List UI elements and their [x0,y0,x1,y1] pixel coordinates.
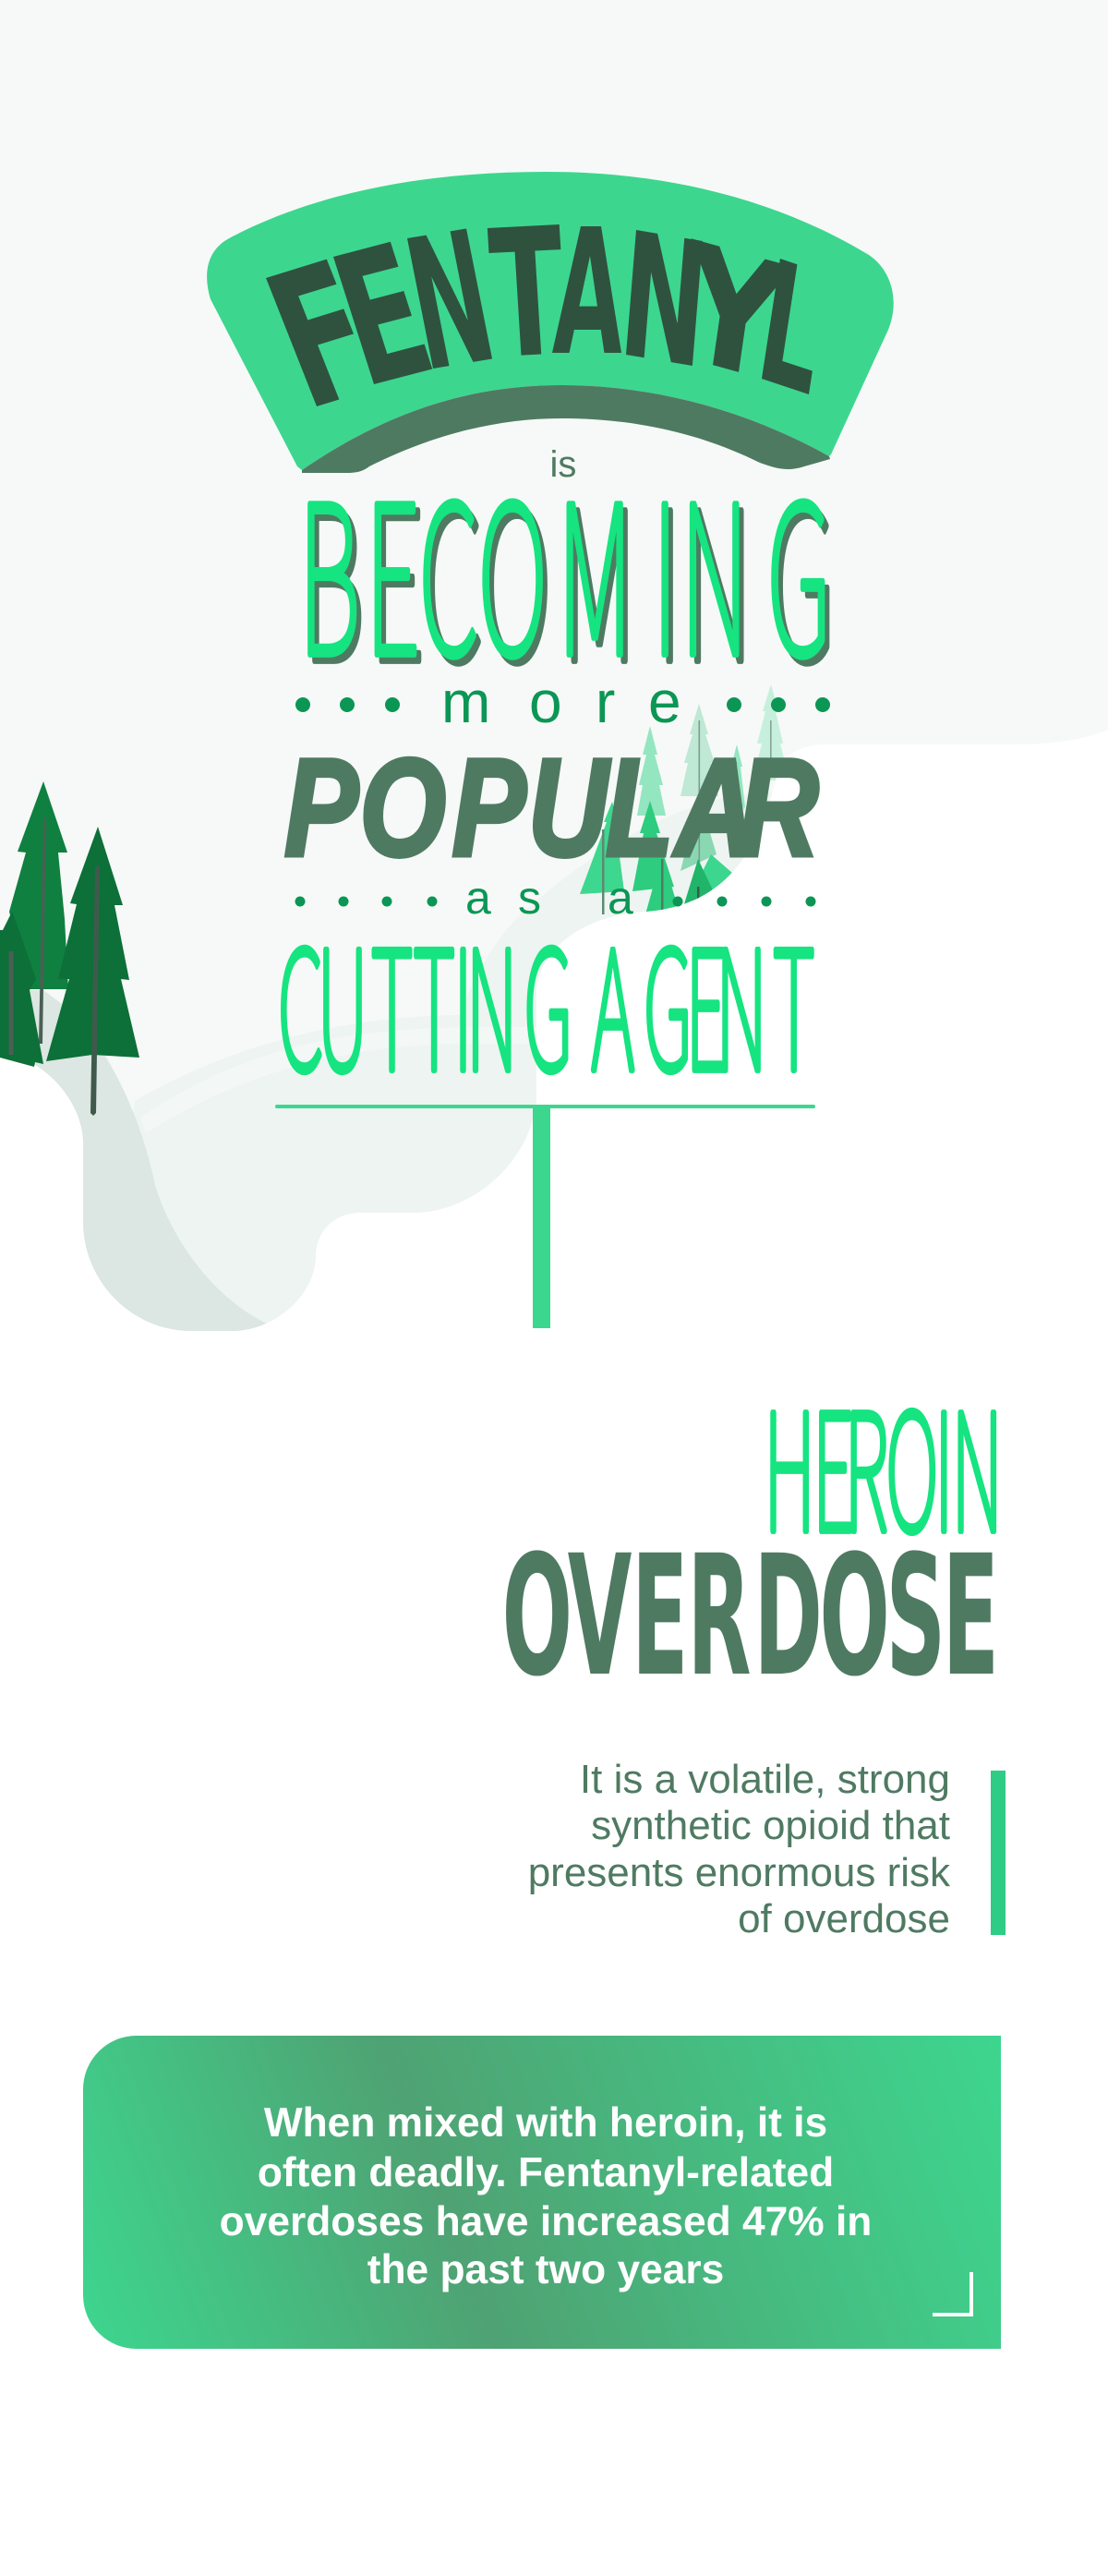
tree: far left tree [0,912,43,1067]
word FENTANYL: L [747,223,835,434]
word FENTANYL: T [485,190,571,399]
tree: palest back tree [757,685,784,780]
banner underside shadow [302,385,830,473]
card background [83,2036,1001,2349]
left forest of trees [0,781,139,1116]
card text: often deadly. Fentanyl-related [258,2150,834,2195]
paragraph with side bar [528,1757,1006,1941]
card text: the past two years [367,2247,724,2292]
word FENTANYL: Y [668,207,799,420]
word FENTANYL: N [613,196,715,408]
word: POPULAR: POPULAR [284,730,819,885]
line: as a with dots: as a [465,872,633,924]
vertical accent bar [991,1771,1006,1935]
tree: back left tree [9,781,72,1044]
paragraph text: of overdose [738,1896,950,1941]
central forest of trees [580,684,789,914]
line: as a with dots [295,872,816,924]
word FENTANYL: E [312,206,454,429]
word FENTANYL: F [242,223,404,453]
tree: light tree center [637,726,666,816]
tree: green tree left [580,802,624,914]
connector line and stem [275,1105,815,1328]
word: HEROIN: HEROIN [764,1344,1003,1578]
tree: green tree middle [632,801,679,914]
line: more with dots [295,669,830,735]
paragraph text: presents enormous risk [528,1850,951,1895]
card text [220,2100,872,2292]
title banner [207,172,894,473]
tree: front right tree [46,827,139,1116]
word: BECOMING: BECOMING [298,417,831,714]
paragraph text [528,1757,951,1941]
words: CUTTING AGENT: CUTTING AGENT [278,879,815,1118]
card text: overdoses have increased 47% in [220,2199,872,2244]
word FENTANYL: N [391,191,509,412]
background hill shapes [0,0,1108,1385]
word FENTANYL: A [550,193,627,394]
tree: light tree right [725,744,745,813]
line: more with dots: more [441,669,681,735]
paragraph text: synthetic opioid that [591,1803,950,1848]
tree: bright and dark trees right [683,854,732,907]
tree: pale tree [680,704,718,887]
word: OVERDOSE: OVERDOSE [502,1519,999,1713]
word FENTANYL [242,190,835,453]
corner mark [933,2272,971,2315]
word: is: is [550,444,576,485]
banner ribbon [207,172,894,470]
callout card [83,2036,1001,2349]
paragraph text: It is a volatile, strong [580,1757,950,1802]
card text: When mixed with heroin, it is [264,2100,827,2146]
